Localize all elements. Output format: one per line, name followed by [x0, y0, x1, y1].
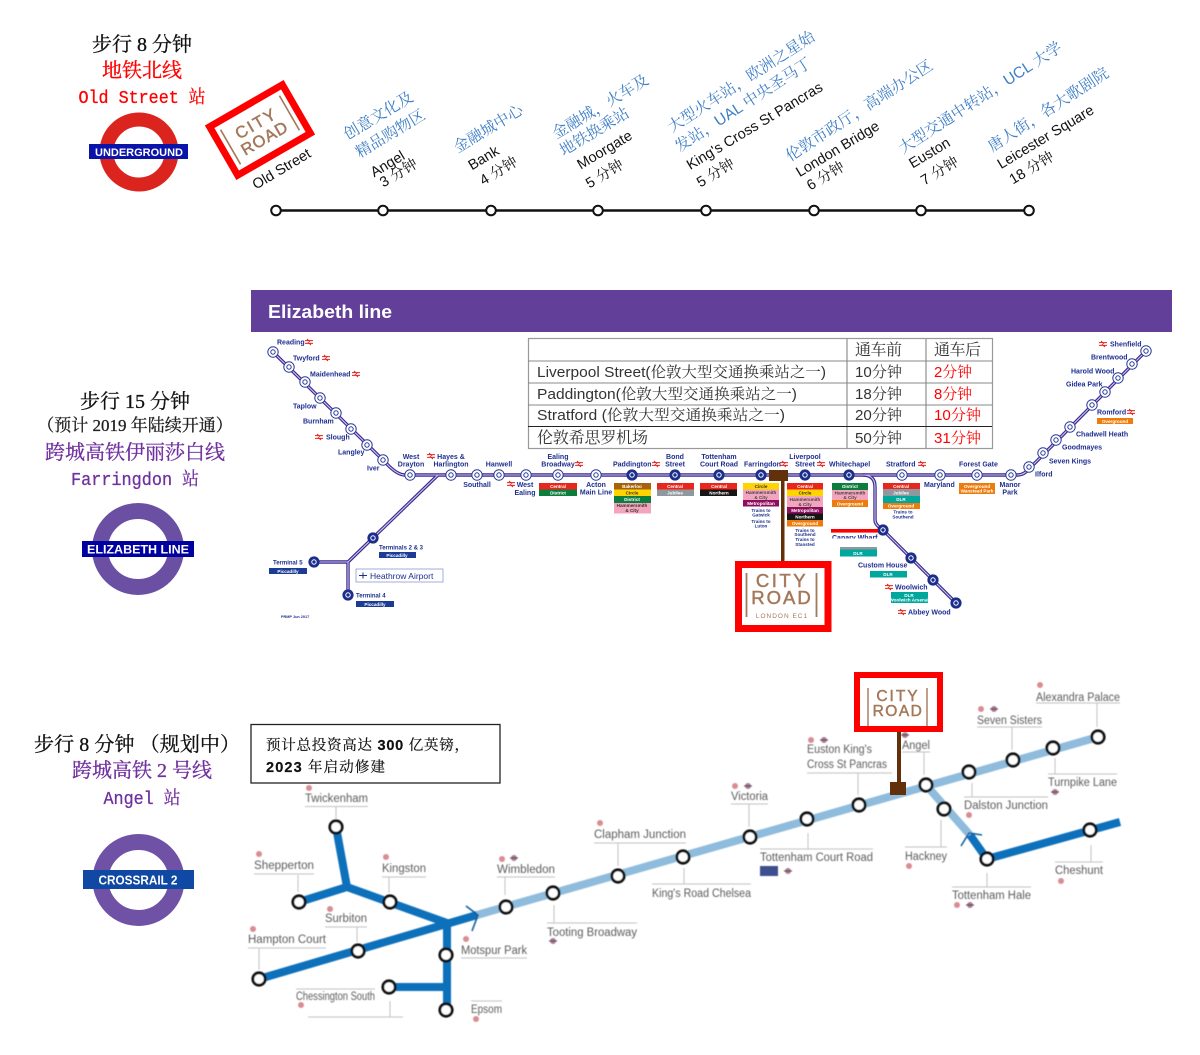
table: journey times: 18分钟	[855, 386, 902, 403]
connections: Farringdon and Liverpool Street: Central	[797, 484, 813, 489]
callout: investment: 预计总投资高达 300 亿英镑，	[266, 736, 469, 754]
icon: Elizabeth line roundel: ELIZABETH LINE	[87, 542, 189, 556]
station names: Euston King's	[807, 744, 872, 756]
connections: Ealing to Tottenham: Northern	[709, 490, 729, 496]
icon: Crossrail 2 roundel: CROSSRAIL 2	[98, 874, 178, 888]
connections: Ealing to Tottenham	[539, 483, 737, 514]
stations	[253, 731, 1104, 1016]
heading: Elizabeth line walk: 跨城高铁伊丽莎白线	[45, 441, 225, 464]
label: Angel: 3 分钟	[377, 155, 421, 191]
label: Moorgate: 地铁换乘站	[556, 103, 632, 160]
station names: Terminal 5	[273, 560, 303, 566]
heading: Northern line walk: Old Street 站	[78, 87, 206, 109]
label: London Bridge: 伦敦市政厅，高端办公区	[782, 56, 936, 165]
station names: Wimbledon	[497, 864, 555, 876]
map: Elizabeth line route	[268, 339, 1151, 619]
marker: City Road at Farringdon: LONDON EC1	[756, 613, 808, 620]
connections: Farringdon and Liverpool Street: Hammersmith	[790, 497, 821, 502]
station names: Turnpike Lane	[1048, 777, 1117, 789]
connections: Ealing to Tottenham: Jubilee	[667, 490, 683, 496]
table: journey times: 31分钟	[934, 430, 981, 447]
connections: eastern stations	[832, 418, 1133, 520]
connections: Ealing to Tottenham: Bakerloo	[622, 484, 642, 489]
connections: Farringdon and Liverpool Street: Northern	[795, 514, 815, 520]
table: journey times	[528, 338, 992, 448]
band title: Elizabeth line	[268, 302, 392, 322]
station names: Motspur Park	[461, 945, 527, 957]
connections: eastern stations: & City	[843, 495, 857, 500]
connections: eastern stations: Wanstead Park	[961, 488, 994, 494]
arrows	[466, 833, 982, 931]
icon: Underground roundel	[89, 120, 188, 184]
station names: Acton	[586, 482, 606, 489]
label: Leicester Square: Leicester Square	[995, 102, 1097, 173]
connections: Farringdon and Liverpool Street: & City	[798, 502, 812, 507]
station names: Tottenham Hale	[952, 890, 1031, 902]
label: Bank: Bank	[466, 143, 503, 174]
station names: Twickenham	[305, 793, 368, 805]
station names: Hampton Court	[248, 934, 327, 946]
marker: City Road at Farringdon	[738, 470, 828, 628]
station names: Kingston	[382, 863, 426, 875]
connections: eastern stations: Jubilee	[893, 490, 909, 496]
station names: Stratford	[886, 462, 916, 468]
connections: south-east branch: DLR	[853, 551, 863, 556]
connections: Farringdon and Liverpool Street: Stansted	[795, 542, 815, 547]
connections: south-east branch	[828, 529, 929, 603]
label: Bank	[450, 100, 528, 189]
station names: Main Line	[580, 490, 612, 496]
connections: Farringdon and Liverpool Street: Hammersmith	[746, 490, 777, 495]
connections: eastern stations: Overground	[888, 504, 914, 508]
station names: Tottenham Court Road	[760, 852, 873, 864]
connections: Ealing to Tottenham: District	[624, 497, 640, 502]
connections: Farringdon and Liverpool Street: Metropolitan	[791, 508, 819, 513]
station names: Seven Kings	[1049, 458, 1091, 466]
station names	[273, 340, 1142, 619]
map: Crossrail 2 route	[248, 682, 1120, 1022]
station names: Court Road	[700, 462, 738, 468]
station names: Tottenham	[701, 454, 737, 461]
header band	[251, 290, 1172, 332]
station names	[248, 692, 1120, 1016]
station names: Reading	[277, 340, 305, 346]
heading: Northern line walk: 地铁北线	[102, 59, 182, 82]
station names: Abbey Wood	[908, 610, 951, 616]
station names: West	[403, 454, 420, 461]
connections: eastern stations: Central	[893, 484, 909, 489]
station names: Alexandra Palace	[1036, 692, 1120, 704]
station names: Maidenhead	[310, 372, 350, 378]
station names: Maryland	[924, 482, 955, 489]
label: London Bridge: 6 分钟	[804, 158, 848, 194]
station names: Shenfield	[1110, 342, 1142, 348]
heading: Elizabeth line walk	[37, 390, 233, 491]
connections: south-east branch: Woolwich Arsenal	[889, 598, 929, 602]
station names: Angel	[902, 740, 930, 752]
connections: Farringdon and Liverpool Street: Metropolitan	[747, 501, 775, 506]
station names: Liverpool	[789, 454, 821, 461]
heading: Crossrail 2 walk: 跨城高铁 2 号线	[72, 759, 212, 782]
label: Euston: 大型交通中转站，UCL 大学	[895, 38, 1066, 157]
connections: Farringdon and Liverpool Street: Circle	[755, 484, 768, 489]
icon: Underground roundel: UNDERGROUND	[95, 147, 183, 159]
line: central light-blue section	[477, 737, 1098, 915]
route lines	[273, 351, 1146, 603]
table: journey times: Stratford (伦敦大型交通换乘站之一)	[537, 406, 785, 424]
station names: Tooting Broadway	[547, 927, 637, 939]
leader lines	[248, 703, 1120, 1017]
station names: Shepperton	[254, 860, 314, 872]
station names: Seven Sisters	[977, 715, 1042, 727]
connections: south-east branch: DLR	[883, 572, 893, 577]
connections: Ealing to Tottenham: Hammersmith	[617, 503, 648, 508]
station names: Goodmayes	[1062, 444, 1102, 452]
heading: Elizabeth line walk: （预计 2019 年陆续开通）	[37, 415, 233, 435]
table: journey times: 通车后	[934, 341, 981, 359]
table: journey times: 2分钟	[934, 364, 972, 381]
station names: Drayton	[398, 462, 424, 468]
heading: Crossrail 2 walk: Angel 站	[104, 788, 180, 810]
stations: step-free	[268, 346, 1151, 609]
callout: Heathrow Airport	[356, 569, 443, 582]
connections: Ealing to Tottenham: Central	[550, 484, 566, 489]
connections: Farringdon and Liverpool Street: Gatwick	[752, 512, 770, 518]
icon: Crossrail 2 roundel	[83, 842, 194, 918]
station names: Hayes &	[437, 454, 465, 461]
connections: eastern stations: Southend	[892, 514, 914, 520]
table: journey times: 通车前	[855, 341, 902, 359]
callout: investment	[251, 724, 500, 783]
table: journey times: Paddington(伦敦大型交通换乘站之一)	[537, 385, 797, 403]
marker: City Road at Angel: CITY	[876, 688, 920, 705]
table: journey times: 20分钟	[855, 407, 902, 424]
station names: Southall	[463, 482, 491, 489]
panel: Elizabeth line	[37, 290, 1172, 628]
station names: Forest Gate	[959, 462, 998, 468]
station names: Epsom	[471, 1004, 502, 1016]
station names: King's Road Chelsea	[652, 888, 752, 900]
connections: Heathrow terminals: Piccadilly	[364, 602, 386, 607]
icon: City Road stamp	[210, 85, 310, 175]
heading: Northern line walk	[78, 33, 206, 109]
connections: Farringdon and Liverpool Street: Overground	[792, 521, 818, 526]
heading: Elizabeth line walk: 步行 15 分钟	[80, 390, 190, 413]
route line: Northern line stations	[271, 206, 1034, 215]
station names: Twyford	[293, 356, 320, 362]
connections: Farringdon and Liverpool Street: Circle	[799, 490, 812, 496]
heading: Crossrail 2 walk: 步行 8 分钟 （规划中）	[34, 733, 240, 756]
label: London Bridge: London Bridge	[793, 118, 882, 181]
label: Angel: Angel	[368, 148, 408, 181]
label: Moorgate: 金融城，火车及	[549, 71, 652, 143]
table: journey times: 10分钟	[855, 364, 902, 381]
connections: south-east branch: Canary Wharf	[832, 535, 878, 542]
rail symbols	[305, 339, 1135, 615]
table: journey times: Liverpool Street(伦敦大型交通换乘站之一)	[537, 363, 826, 381]
connections: Ealing to Tottenham: & City	[625, 508, 639, 513]
marker: City Road at Angel	[857, 675, 940, 795]
station names: Street	[795, 462, 816, 468]
label: Old Street: Old Street	[250, 146, 314, 193]
connections: Heathrow terminals: Piccadilly	[386, 553, 408, 558]
station names: Terminals 2 & 3	[379, 546, 424, 552]
connections: Ealing to Tottenham: Central	[667, 484, 683, 489]
connections: Farringdon and Liverpool Street: Trains to	[751, 519, 771, 524]
station names: Surbiton	[325, 913, 367, 925]
station names: Ilford	[1035, 472, 1052, 478]
connections: Farringdon and Liverpool Street: Trains to	[795, 528, 815, 533]
station names: Woolwich	[895, 584, 928, 592]
station names: Iver	[367, 466, 380, 472]
table: journey times: 8分钟	[934, 386, 972, 403]
station names: Gidea Park	[1066, 382, 1103, 388]
station names: Street	[665, 462, 686, 468]
station names: Broadway	[541, 462, 575, 468]
station names: Brentwood	[1091, 354, 1128, 362]
station names: Taplow	[293, 404, 317, 410]
connections: eastern stations: Overground	[964, 484, 990, 489]
station names: Paddington	[613, 462, 652, 468]
station names: Hanwell	[486, 462, 512, 468]
icon: Elizabeth line roundel	[82, 511, 194, 587]
label: King's Cross: 发站，UAL 中央圣马丁	[672, 54, 815, 156]
station names: Farringdon	[744, 462, 781, 468]
label: Moorgate	[549, 71, 652, 192]
connections: eastern stations: District	[842, 484, 858, 489]
label: Euston: Euston	[906, 135, 953, 172]
marker: City Road at Angel: ROAD	[873, 703, 923, 720]
connections: Ealing to Tottenham: Circle	[626, 490, 639, 496]
connections: eastern stations: Overground	[837, 502, 863, 506]
connections: eastern stations: Trains to	[893, 510, 913, 514]
connections: Farringdon and Liverpool Street: Trains to	[795, 537, 815, 542]
station names: Harlington	[434, 462, 468, 468]
table: journey times: 伦敦希思罗机场	[537, 429, 648, 447]
heading: Crossrail 2 walk	[34, 733, 240, 810]
connections: Farringdon and Liverpool Street: Southend	[794, 532, 816, 537]
station names: Ealing	[547, 454, 569, 461]
connections: eastern stations: Hammersmith	[835, 490, 866, 496]
label: Bank: 金融城中心	[450, 100, 528, 157]
station names: Victoria	[731, 791, 769, 803]
connections: south-east branch: DLR	[904, 593, 914, 598]
station names: Park	[1002, 490, 1018, 496]
label: Moorgate: 5 分钟	[583, 156, 627, 192]
line: dark-blue branches	[259, 822, 1120, 1010]
station names: Langley	[338, 450, 365, 456]
station names: Chessington South	[296, 991, 375, 1003]
station names: Romford	[1097, 410, 1126, 416]
station names: Terminal 4	[356, 594, 386, 600]
label: Euston: 7 分钟	[918, 153, 962, 189]
connections: Farringdon and Liverpool Street: & City	[754, 495, 768, 500]
connections: eastern stations: DLR	[896, 497, 906, 502]
station names: Ealing	[514, 490, 536, 497]
table: journey times: 10分钟	[934, 407, 981, 424]
station names: Manor	[1000, 482, 1021, 489]
station names: Cross St Pancras	[807, 759, 887, 771]
connections: Heathrow terminals: Piccadilly	[277, 569, 299, 574]
panel: Crossrail 2	[34, 675, 1120, 1022]
station names: Dalston Junction	[964, 800, 1048, 812]
label: King's Cross	[664, 27, 826, 191]
label: Angel: 创意文化及	[340, 88, 417, 144]
connections: Ealing to Tottenham: District	[550, 490, 566, 496]
icon: City Road stamp: ROAD	[238, 118, 292, 159]
station names: Cheshunt	[1055, 865, 1104, 877]
icon: City Road stamp: CITY	[232, 105, 281, 143]
heading: Northern line walk: 步行 8 分钟	[92, 33, 192, 56]
station names: Clapham Junction	[594, 829, 686, 841]
station names: West	[517, 482, 534, 489]
station names: Slough	[326, 434, 350, 442]
connections: Farringdon and Liverpool Street	[743, 483, 823, 547]
label: King's Cross: 5 分钟	[694, 155, 738, 191]
table: journey times: 50分钟	[855, 430, 902, 447]
label: Leicester Square: 18 分钟	[1006, 148, 1057, 188]
marker: City Road at Farringdon: CITY	[756, 570, 808, 591]
station names: Bond	[666, 454, 684, 461]
station names: Burnham	[303, 418, 334, 426]
connections: Farringdon and Liverpool Street: Trains to	[751, 508, 771, 513]
connections: Heathrow terminals	[269, 552, 416, 607]
marker: City Road at Farringdon: ROAD	[751, 587, 813, 608]
station names: Chadwell Heath	[1076, 432, 1128, 438]
connections: eastern stations: Overground	[1102, 419, 1128, 424]
connections: Ealing to Tottenham: Central	[711, 484, 727, 489]
panel: Northern line	[78, 27, 1112, 215]
station names: Hackney	[905, 851, 947, 863]
label: King's Cross: King's Cross St Pancras	[684, 80, 826, 174]
label: Leicester Square: 唐人街，各大歌剧院	[984, 63, 1112, 156]
station names: Custom House	[858, 562, 908, 570]
station names: Whitechapel	[829, 462, 870, 468]
label: Bank: 4 分钟	[477, 153, 521, 189]
station names: Harold Wood	[1071, 368, 1114, 376]
station names: PRMP Jun 2017	[281, 615, 309, 619]
callout: Heathrow Airport: Heathrow Airport	[370, 571, 434, 581]
label: King's Cross: 大型火车站，欧洲之星始	[664, 27, 818, 136]
label: Angel: 精品购物区	[352, 106, 428, 162]
label: Moorgate: Moorgate	[575, 128, 635, 173]
callout: investment: 2023 年启动修建	[266, 758, 386, 776]
connections: Farringdon and Liverpool Street: Luton	[755, 524, 768, 528]
heading: Elizabeth line walk: Farringdon 站	[71, 469, 199, 491]
label: Angel	[340, 88, 428, 191]
interchange symbols	[250, 682, 1064, 1022]
